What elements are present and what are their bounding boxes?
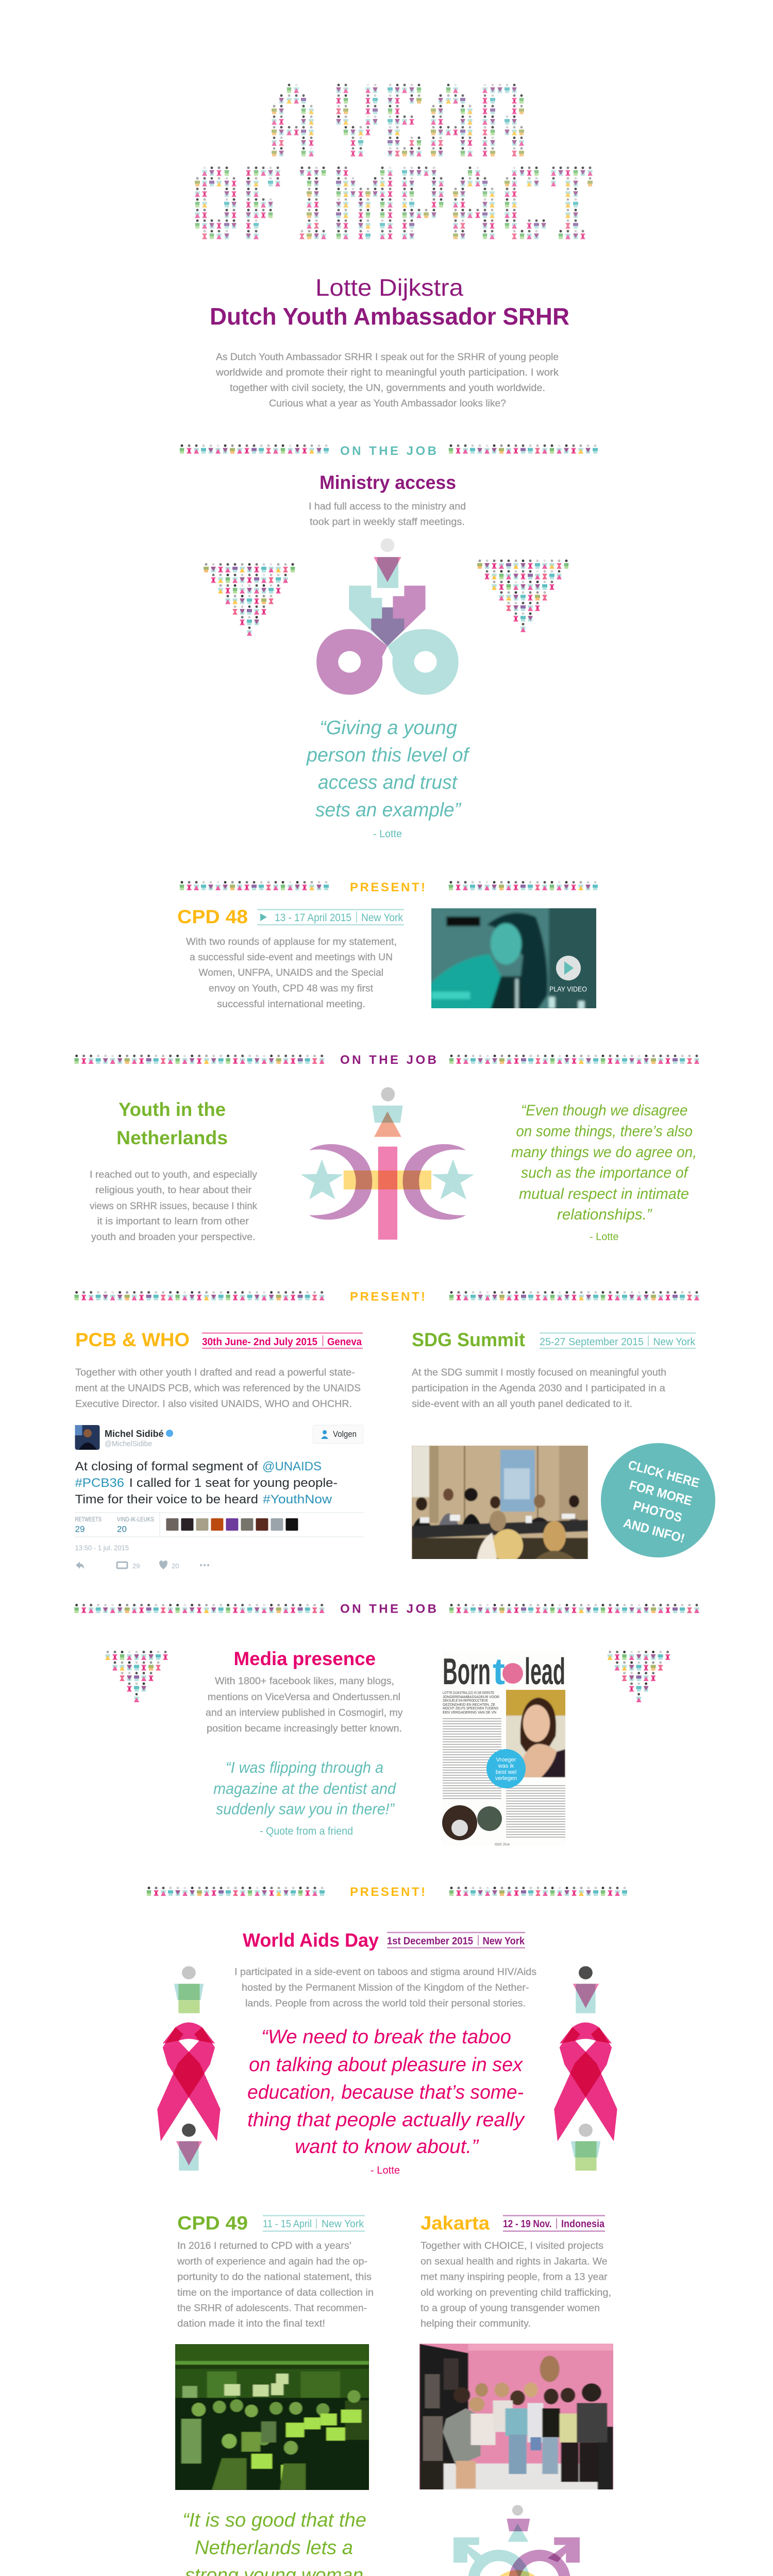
text block: helping their community. [421, 2318, 531, 2329]
tweet: Michel Sidibé [105, 1429, 164, 1439]
heading: CPD 49 [177, 2212, 248, 2234]
quote: want to know about.” [295, 2136, 479, 2158]
magazine page: Born [443, 1651, 491, 1692]
magazine page: SEKSUELE EN REPRODUCTIEVE [443, 1698, 488, 1703]
date tag [263, 2215, 365, 2231]
text block: took part in weekly staff meetings. [310, 517, 465, 528]
people triangle right [608, 1651, 670, 1702]
text block: I reached out to youth, and especially [90, 1170, 258, 1180]
heading: Netherlands [116, 1127, 228, 1148]
heading: Youth in the [119, 1099, 226, 1120]
text block [309, 501, 466, 528]
quote: “We need to break the taboo [261, 2026, 511, 2048]
author heading: Dutch Youth Ambassador SRHR [210, 303, 569, 330]
figures and ribbons [157, 1966, 617, 2171]
intro text: Curious what a year as Youth Ambassador looks like? [269, 398, 506, 409]
text block: a successful side-event and meetings with UN [190, 952, 393, 963]
quote: many things we do agree on, [511, 1144, 697, 1161]
quote attribution: - Lotte [373, 828, 402, 840]
quote attribution: - Quote from a friend [260, 1825, 353, 1837]
text block: Together with other youth I drafted and read a powerful state- [75, 1367, 355, 1378]
text block [234, 1967, 536, 2009]
tweet [75, 1425, 363, 1570]
magazine pull quote: Vroeger [496, 1757, 516, 1763]
text block: lands. People from across the world told their personal stories. [245, 1998, 526, 2009]
quote: thing that people actually really [247, 2109, 525, 2131]
text block: on sexual health and rights in Jakarta. We [421, 2256, 608, 2267]
tweet stats: 20 [117, 1524, 127, 1534]
text block: youth and broaden your perspective. [91, 1232, 256, 1243]
text block: Executive Director. I also visited UNAIDS, WHO and OHCHR. [75, 1399, 352, 1410]
text block: With two rounds of applause for my statement, [186, 937, 397, 947]
magazine page: EEN VERGADERING VAN DE VN [443, 1710, 496, 1715]
text block: side-event with an all youth panel dedicated to it. [412, 1399, 632, 1410]
date tag: New York [361, 912, 403, 924]
heading: Jakarta [421, 2212, 490, 2234]
date tag: New York [483, 1936, 525, 1947]
text block: and an interview published in Cosmogirl, my [206, 1708, 403, 1719]
text block: In 2016 I returned to CPD with a years’ [177, 2241, 351, 2251]
date tag: 11 - 15 April [263, 2218, 312, 2230]
text block: position became increasingly better known. [207, 1723, 402, 1734]
intro text: together with civil society, the UN, governments and youth worldwide. [230, 383, 545, 394]
date tag: 12 - 19 Nov. [503, 2218, 551, 2230]
text block: I participated in a side-event on taboos and stigma around HIV/Aids [234, 1967, 536, 1978]
text block: worth of experience and again had the op- [177, 2256, 367, 2267]
quote attribution: - Lotte [371, 2165, 400, 2176]
tweet actions [76, 1561, 209, 1570]
callout: click here circle: FOR MORE [628, 1478, 694, 1509]
ribbon: right [554, 2023, 617, 2141]
magazine page: lead [525, 1651, 565, 1692]
text block: met many inspiring people, from a 13 year [421, 2272, 608, 2282]
tweet: @MichelSidibe [105, 1439, 152, 1448]
text block [186, 937, 397, 1010]
tweet text: At closing of formal segment of [75, 1460, 258, 1473]
quote: “Giving a young [320, 717, 457, 739]
icon: gender symbols with people [453, 2505, 580, 2576]
text block [421, 2241, 611, 2329]
quote: education, because that’s some- [247, 2081, 524, 2103]
quote: mutual respect in intimate [519, 1185, 689, 1202]
magazine page: GEZONDHEID EN RECHTEN. ZE [443, 1702, 495, 1707]
text block: hosted by the Permanent Mission of the Kingdom of the Nether- [242, 1982, 529, 1993]
people triangle right [477, 560, 569, 632]
magazine page: JONGERENAMBASSADEUR VOOR [443, 1694, 500, 1699]
panel: PCB and WHO [75, 1329, 363, 1570]
tweet stats: RETWEETS [75, 1516, 102, 1523]
person: top left [174, 1966, 204, 2013]
quote [511, 1102, 697, 1223]
callout: click here circle: CLICK HERE [627, 1458, 701, 1490]
tweet actions: 20 [172, 1562, 179, 1570]
tweet stats: VIND-IK-LEUKS [117, 1516, 154, 1523]
panel: ministry access [204, 472, 569, 840]
quote: relationships.” [557, 1206, 653, 1223]
title: people forming the words A YEAR OF IMPACT: A YEAR [274, 94, 527, 169]
text block [90, 1170, 258, 1243]
text block: to a group of young transgender women [421, 2303, 600, 2314]
quote: delegate [182, 2510, 366, 2576]
quote: delegate: “It is so good that the [182, 2510, 366, 2531]
text block: mentions on ViceVersa and Ondertussen.nl [208, 1692, 400, 1703]
author heading [210, 274, 569, 330]
section band: present: PRESENT! [350, 1885, 425, 1899]
title: people forming the words A YEAR OF IMPACT: OF IMPACT [195, 176, 593, 251]
callout: click here circle [601, 1443, 715, 1557]
liker avatars [166, 1518, 298, 1531]
callout: click here circle: PHOTOS [632, 1498, 684, 1525]
date tag: New York [653, 1336, 696, 1348]
text block: Women, UNFPA, UNAIDS and the Special [199, 968, 383, 978]
date tag: New York [322, 2218, 364, 2230]
tweet text: Time for their voice to be heard [75, 1493, 258, 1506]
date tag: 13 - 17 April 2015 [275, 912, 351, 924]
date tag [387, 1933, 525, 1948]
callout: click here circle: AND INFO! [622, 1516, 686, 1546]
quote: magazine at the dentist and [213, 1780, 397, 1798]
people triangle left [105, 1651, 168, 1702]
date tag: Geneva [327, 1336, 362, 1348]
date tag: 25-27 September 2015 [540, 1336, 644, 1348]
intro text: As Dutch Youth Ambassador SRHR I speak out for the SRHR of young people [216, 352, 559, 363]
quote [247, 2026, 525, 2158]
section band: on the job: ON THE JOB [340, 1602, 436, 1616]
icon: person with scissors [316, 538, 459, 695]
magazine pull quote: verlegen [495, 1775, 517, 1782]
photo: youth panel [410, 1443, 590, 1562]
quote: delegate: Netherlands lets a [195, 2537, 353, 2559]
heading: Media presence [234, 1648, 376, 1669]
text block: I had full access to the ministry and [309, 501, 466, 512]
text block: it is important to learn from other [97, 1216, 249, 1227]
text block: time on the importance of data collection in [177, 2287, 374, 2298]
photo: group in pink room [416, 2343, 616, 2491]
quote: sets an example” [315, 800, 462, 821]
section band: present [145, 1885, 628, 1899]
text block: Together with CHOICE, I visited projects [421, 2241, 603, 2251]
panel: CPD 48 [177, 904, 600, 1012]
text block: portunity to do the national statement, this [177, 2272, 372, 2282]
date tag [540, 1333, 696, 1348]
heading: World Aids Day [243, 1930, 379, 1951]
quote: person this level of [306, 744, 470, 766]
tweet avatar [75, 1425, 100, 1450]
magazine pull quote: was ik [498, 1763, 514, 1769]
section band: present: PRESENT! [350, 1290, 425, 1303]
date tag: 30th June- 2nd July 2015 [202, 1336, 317, 1348]
tweet text: #PCB36 [75, 1476, 124, 1490]
title: people forming the words A YEAR OF IMPACT [195, 83, 593, 251]
quote: on some things, there’s also [516, 1123, 693, 1140]
heading: SDG Summit [412, 1329, 525, 1350]
icon: person with crescents and stars [301, 1087, 474, 1240]
panel: media presence [105, 1648, 670, 1846]
section band: present [73, 1290, 700, 1303]
quote: “I was flipping through a [226, 1758, 383, 1776]
tweet text: @UNAIDS [262, 1460, 322, 1473]
section band: present: PRESENT! [350, 880, 425, 894]
heading [116, 1099, 228, 1148]
photo: delegates with signs [173, 2343, 372, 2491]
date tag: Indonesia [561, 2218, 605, 2230]
tweet stats [75, 1516, 154, 1534]
date tag: 1st December 2015 [387, 1936, 473, 1947]
tweet text [75, 1460, 338, 1506]
heading: CPD 48 [177, 906, 248, 927]
section band: on the job [73, 1053, 700, 1067]
text block: religious youth, to hear about their [95, 1185, 252, 1196]
tweet: 13:50 - 1 jul. 2015 [75, 1544, 129, 1552]
text block: participation in the Agenda 2030 and I participated in a [412, 1383, 665, 1394]
tweet actions: 29 [132, 1562, 140, 1570]
panel: CPD 49 [173, 2212, 374, 2491]
magazine page: t [493, 1651, 505, 1692]
magazine page: LOTTE DIJKSTRA (22) IS DE EERSTE [443, 1690, 494, 1695]
date tag [257, 910, 404, 925]
magazine pull quote: best wel [496, 1769, 516, 1775]
quote: “Even though we disagree [521, 1102, 687, 1119]
date tag [503, 2215, 605, 2231]
magazine pull quote [486, 1749, 526, 1788]
people triangle left [204, 563, 295, 636]
heading: PCB & WHO [75, 1329, 190, 1350]
text block [206, 1676, 403, 1734]
text block: successful international meeting. [217, 999, 365, 1010]
text block: With 1800+ facebook likes, many blogs, [215, 1676, 394, 1687]
heading: Ministry access [320, 472, 456, 493]
tweet text: #YouthNow [263, 1493, 332, 1506]
follow button [313, 1425, 363, 1444]
quote: access and trust [318, 772, 458, 793]
text block: envoy on Youth, CPD 48 was my first [209, 983, 374, 994]
section band: present [178, 880, 599, 894]
magazine page: IDEE 2014 [495, 1843, 510, 1846]
video still: PLAY VIDEO [549, 985, 587, 993]
text block: dation made it into the final text! [177, 2318, 325, 2329]
quote: on talking about pleasure in sex [249, 2054, 524, 2076]
text block: old working on preventing child trafficking, [421, 2287, 611, 2298]
intro text: worldwide and promote their right to meaningful youth participation. I work [215, 367, 559, 378]
quote: suddenly saw you in there!” [216, 1800, 395, 1818]
section band: on the job: ON THE JOB [340, 1053, 436, 1067]
quote [213, 1758, 397, 1818]
person: bottom left [176, 2124, 202, 2171]
quote attribution: - Lotte [590, 1231, 618, 1243]
text block: the SRHR of adolescents. That recommen- [177, 2303, 367, 2314]
text block: views on SRHR issues, because I think [90, 1201, 257, 1212]
magazine page [442, 1651, 569, 1846]
author heading: Lotte Dijkstra [315, 274, 463, 301]
person: top right [573, 1966, 599, 2013]
quote: such as the importance of [521, 1164, 689, 1181]
panel: world aids day [157, 1930, 617, 2176]
section band: on the job: ON THE JOB [340, 444, 436, 458]
video still [431, 908, 596, 1008]
text block: At the SDG summit I mostly focused on meaningful youth [412, 1367, 666, 1378]
text block [177, 2241, 374, 2329]
panel: Jakarta [416, 2212, 616, 2491]
text block [75, 1367, 361, 1410]
text block [412, 1367, 666, 1410]
icon: play button [556, 956, 581, 980]
magazine page: MOCHT ZELFS SPEECHEN TIJDENS [443, 1706, 498, 1710]
section band: on the job [73, 1602, 700, 1616]
panel: youth in the netherlands [90, 1087, 697, 1243]
intro text [215, 352, 559, 409]
ribbon: left [157, 2023, 221, 2141]
date tag [202, 1333, 363, 1348]
tweet stats: 29 [75, 1524, 85, 1534]
tweet text: I called for 1 seat for young people- [129, 1476, 338, 1490]
section band: on the job [178, 444, 599, 458]
quote [306, 717, 470, 821]
panel: SDG summit [410, 1329, 715, 1562]
person: bottom right [571, 2124, 600, 2171]
follow button: Volgen [333, 1429, 357, 1439]
text block: ment at the UNAIDS PCB, which was referenced by the UNAIDS [75, 1383, 361, 1394]
